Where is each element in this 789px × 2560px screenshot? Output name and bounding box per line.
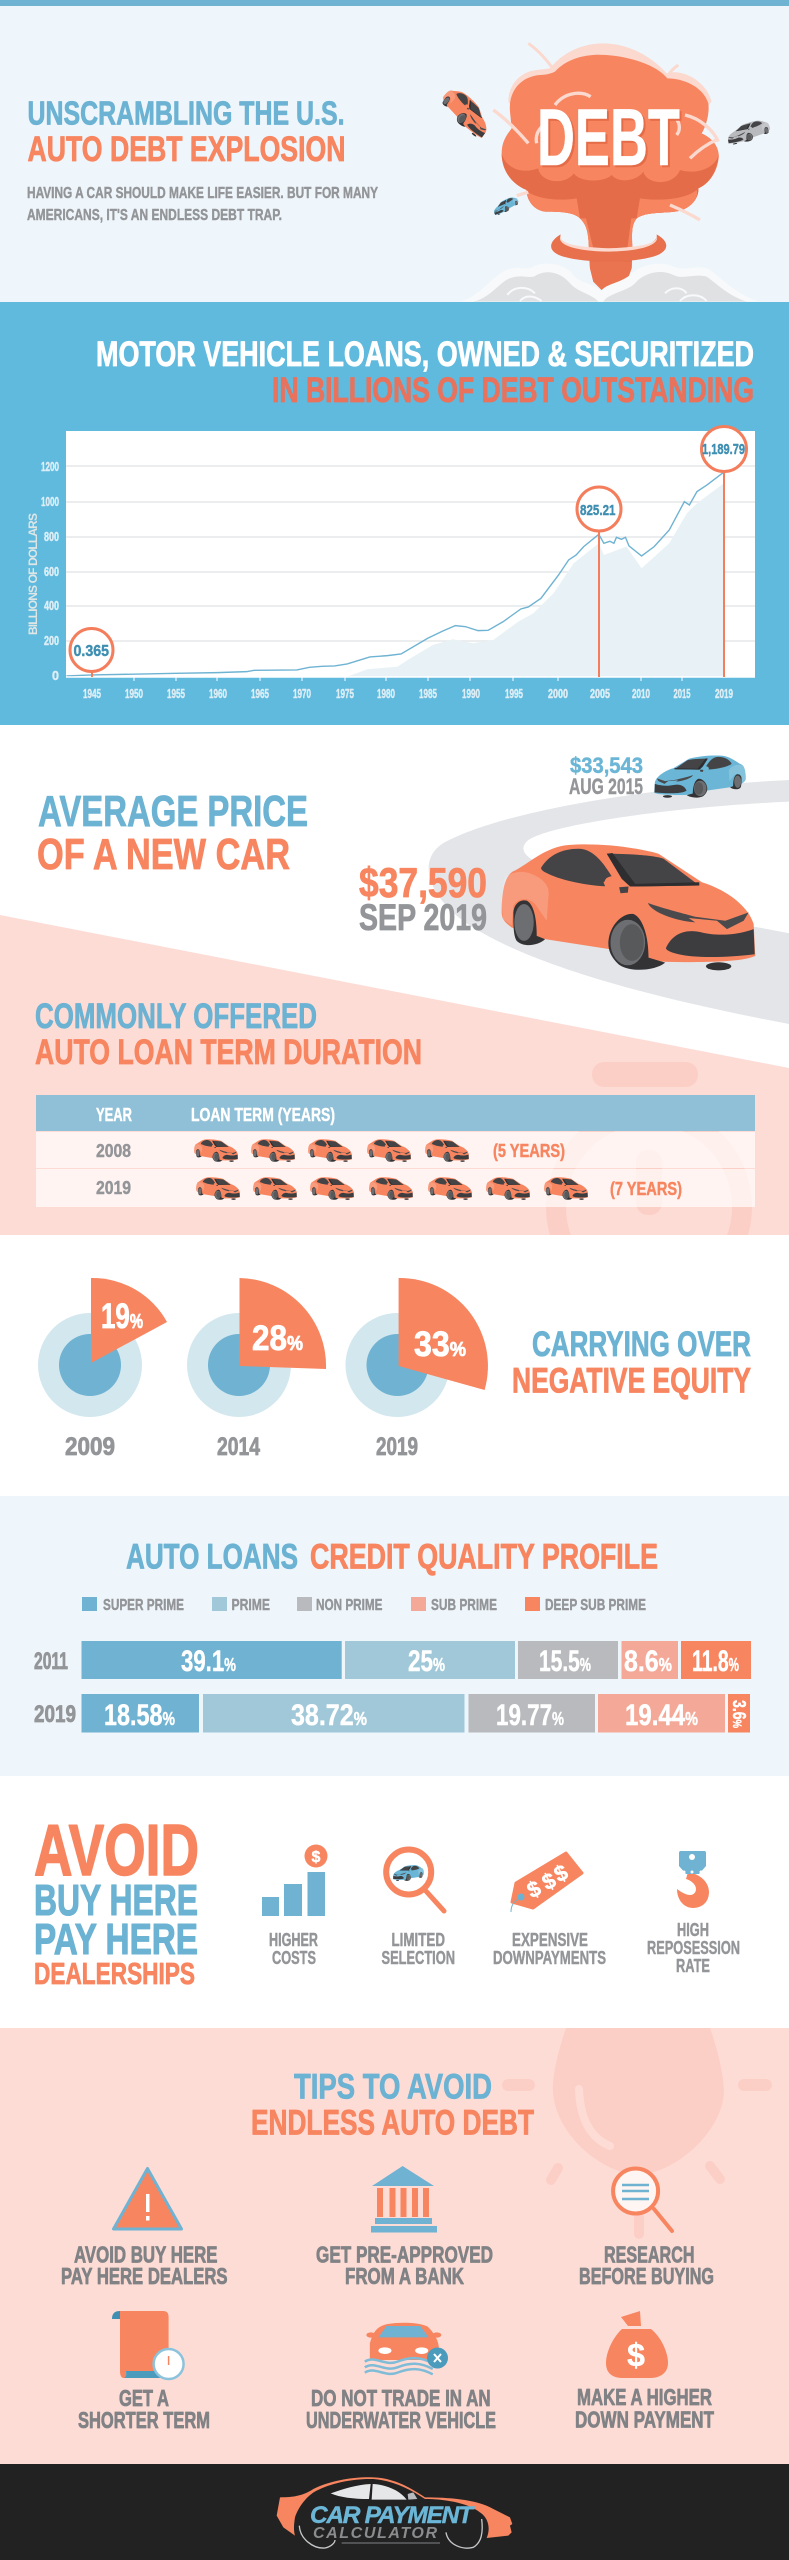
bar: 2011: 11.8% <box>692 1645 739 1678</box>
label: high reposession rate: RATE <box>676 1956 710 1976</box>
tip: higher down payment: $ <box>627 2337 645 2373</box>
tip: shorter term: SHORTER TERM <box>78 2407 210 2433</box>
heading: average price <box>37 787 308 879</box>
legend: DEEP SUB PRIME <box>545 1597 646 1614</box>
line chart: 1995 <box>505 687 523 701</box>
watermark: stopwatch <box>556 1062 742 1300</box>
tip: avoid dealers: PAY HERE DEALERS <box>61 2263 228 2289</box>
heading: credit quality: CREDIT QUALITY PROFILE <box>310 1538 658 1576</box>
callout: 2005 value <box>577 487 621 677</box>
road <box>429 780 789 1024</box>
heading: average price: OF A NEW CAR <box>37 830 290 879</box>
heading: tips: TIPS TO AVOID <box>294 2068 492 2106</box>
bar: 2011: 8.6% <box>624 1645 672 1678</box>
bar: 2019 <box>34 1694 750 1732</box>
icon: higher costs <box>262 1844 328 1916</box>
tip: higher down payment <box>575 2311 714 2432</box>
pie: 2014 <box>187 1278 326 1461</box>
pie: 2019: 33% <box>414 1325 466 1364</box>
heading: average price: AVERAGE PRICE <box>38 787 308 836</box>
heading: loan term: COMMONLY OFFERED <box>35 997 317 1036</box>
heading: avoid: PAY HERE <box>34 1915 198 1964</box>
label: high reposession rate <box>647 1920 740 1976</box>
chart heading <box>96 335 754 410</box>
pie: 2019: 2019 <box>376 1433 418 1461</box>
label: high reposession rate: HIGH <box>677 1920 709 1940</box>
heading: tips: ENDLESS AUTO DEBT <box>251 2104 534 2142</box>
label: higher costs: HIGHER <box>269 1930 318 1950</box>
tip: research: BEFORE BUYING <box>579 2263 714 2289</box>
line chart: 800 <box>44 530 59 544</box>
pie: 2014: 28% <box>252 1319 303 1358</box>
price 2019: $37,590 <box>359 859 487 906</box>
line chart: 1980 <box>377 687 395 701</box>
heading: avoid: DEALERSHIPS <box>34 1956 195 1991</box>
line chart: 1960 <box>209 687 227 701</box>
tip: avoid dealers <box>61 2168 228 2289</box>
table: loan term: LOAN TERM (YEARS) <box>191 1105 335 1125</box>
bar: 2019: 38.72% <box>291 1699 367 1732</box>
line chart: 1950 <box>125 687 143 701</box>
icon: flying orange car <box>436 84 497 140</box>
heading: credit quality: AUTO LOANS <box>126 1538 298 1576</box>
legend: PRIME <box>232 1597 270 1614</box>
callout: 2019 value <box>702 426 746 677</box>
tip: bank: FROM A BANK <box>345 2263 464 2289</box>
icon: price tag: $ <box>550 1859 572 1887</box>
illustration: debt mushroom cloud <box>460 43 758 302</box>
pie: 2009: 19% <box>101 1297 143 1336</box>
icon: tow hook <box>677 1851 709 1908</box>
label: higher costs <box>269 1930 318 1968</box>
tip: bank: GET PRE-APPROVED <box>316 2242 493 2268</box>
legend: SUB PRIME <box>431 1597 497 1614</box>
illustration: debt mushroom cloud: DEBT <box>539 95 682 185</box>
icon: price tag: $ <box>538 1867 560 1895</box>
row: 2008 <box>96 1139 565 1162</box>
line chart: 2019 <box>715 687 733 701</box>
bar: 2019: 18.58% <box>104 1699 175 1732</box>
callout: 2019 value: 1,189.79 <box>702 441 745 458</box>
legend <box>82 1597 646 1614</box>
label: limited selection: LIMITED <box>392 1930 445 1950</box>
icon: flying blue car <box>491 195 520 216</box>
pie: 2014: 2014 <box>217 1433 260 1461</box>
table: loan term <box>36 1095 755 1207</box>
icon: limited selection <box>386 1850 444 1911</box>
illustration: debt mushroom cloud: DEBT <box>537 93 680 183</box>
line chart: 1945 <box>83 687 101 701</box>
legend: SUPER PRIME <box>103 1597 184 1614</box>
tip: shorter term <box>78 2311 210 2433</box>
tip: higher down payment: MAKE A HIGHER <box>577 2384 712 2410</box>
tip: shorter term: GET A <box>119 2385 169 2411</box>
label: expensive downpayments <box>493 1930 606 1968</box>
line chart <box>26 426 755 701</box>
icon: higher costs: $ <box>312 1849 321 1866</box>
tip: underwater vehicle: UNDERWATER VEHICLE <box>306 2407 496 2433</box>
panel: header <box>0 0 789 303</box>
line chart: 1000 <box>41 495 59 509</box>
row: 2008: (5 YEARS) <box>493 1141 565 1161</box>
row: 2019: 2019 <box>96 1178 131 1198</box>
watermark: lightbulb <box>502 2028 772 2239</box>
icon: price tag: $ <box>523 1875 545 1903</box>
line chart: 200 <box>44 634 59 648</box>
panel: negative equity <box>0 1235 789 1496</box>
price 2015: AUG 2015 <box>569 774 643 799</box>
row: 2019: (7 YEARS) <box>610 1179 682 1199</box>
row: 2008: 2008 <box>96 1141 131 1161</box>
intro text: HAVING A CAR SHOULD MAKE LIFE EASIER. BUT FOR MANY <box>27 185 378 202</box>
callout: 1945 value <box>70 628 113 677</box>
line chart: 2000 <box>548 687 568 701</box>
bar: 2011 <box>34 1641 751 1679</box>
panel: avoid dealerships <box>34 1811 740 1991</box>
legend: NON PRIME <box>316 1597 383 1614</box>
label: higher costs: COSTS <box>272 1948 316 1968</box>
line chart: 1985 <box>419 687 437 701</box>
panel: credit quality <box>0 1496 789 1776</box>
logo: car payment calculator <box>277 2477 512 2548</box>
heading: loan term <box>35 997 422 1072</box>
logo: car payment calculator: CALCULATOR <box>313 2525 437 2542</box>
pie: 2009: 2009 <box>65 1433 115 1461</box>
bar: 2011: 39.1% <box>181 1645 236 1678</box>
label: expensive downpayments: EXPENSIVE <box>512 1930 588 1950</box>
heading: avoid: BUY HERE <box>34 1876 198 1925</box>
bar: 2019: 2019 <box>34 1701 76 1728</box>
label: high reposession rate: REPOSESSION <box>647 1938 740 1958</box>
tip: underwater vehicle: DO NOT TRADE IN AN <box>311 2385 491 2411</box>
line chart: 1200 <box>41 460 59 474</box>
line chart: 2010 <box>632 687 650 701</box>
tip: research: RESEARCH <box>604 2242 694 2268</box>
logo: car payment calculator: CAR PAYMENT <box>310 2502 475 2529</box>
bar: 2019: 19.77% <box>496 1699 564 1732</box>
panel: average price and loan term <box>0 725 789 1300</box>
tip: higher down payment: DOWN PAYMENT <box>575 2406 714 2432</box>
line chart: 0 <box>52 669 59 683</box>
tip: avoid dealers: AVOID BUY HERE <box>74 2242 218 2268</box>
callout: 1945 value: 0.365 <box>74 643 109 660</box>
tip: research <box>579 2168 714 2289</box>
callout: 2005 value: 825.21 <box>580 502 616 519</box>
intro text: AMERICANS, IT'S AN ENDLESS DEBT TRAP. <box>27 207 282 224</box>
price 2019: SEP 2019 <box>359 897 487 938</box>
title: AUTO DEBT EXPLOSION <box>28 130 346 169</box>
label: limited selection <box>382 1930 455 1968</box>
label: limited selection: SELECTION <box>382 1948 455 1968</box>
heading: loan term: AUTO LOAN TERM DURATION <box>35 1033 422 1072</box>
line chart: 1990 <box>462 687 480 701</box>
bar: 2011: 2011 <box>34 1648 68 1675</box>
heading: avoid: AVOID <box>34 1811 199 1891</box>
price 2015 <box>569 753 643 799</box>
icon: orange car <box>502 844 755 970</box>
panel: tips <box>0 2028 789 2464</box>
table: loan term: YEAR <box>96 1105 132 1125</box>
label: expensive downpayments: DOWNPAYMENTS <box>493 1948 606 1968</box>
line chart: 1975 <box>336 687 354 701</box>
price 2019 <box>359 859 487 938</box>
tip: bank <box>316 2166 493 2289</box>
icon: blue car <box>654 755 746 798</box>
title <box>28 94 346 169</box>
intro text <box>27 185 378 224</box>
bar: 2011: 15.5% <box>539 1645 591 1678</box>
icon: flying gray car <box>725 118 772 146</box>
row: 2019 <box>96 1177 682 1200</box>
heading: avoid <box>34 1811 199 1991</box>
line chart: 1970 <box>293 687 311 701</box>
panel: footer <box>0 2464 789 2560</box>
line chart: 1955 <box>167 687 185 701</box>
bar: 2019: 19.44% <box>625 1699 698 1732</box>
price 2015: $33,543 <box>570 753 643 778</box>
pie: 2019 <box>346 1278 488 1461</box>
tip: underwater vehicle <box>306 2323 496 2433</box>
line chart: 2015 <box>674 687 691 701</box>
icon: price tag <box>511 1853 582 1912</box>
line chart: 600 <box>44 565 59 579</box>
heading: negative equity <box>512 1325 751 1400</box>
heading: tips <box>251 2068 534 2142</box>
line chart: 2005 <box>590 687 610 701</box>
bar: 2019: 3.6% <box>729 1700 749 1728</box>
line chart: BILLIONS OF DOLLARS <box>26 513 40 635</box>
line chart: 1965 <box>251 687 269 701</box>
title: UNSCRAMBLING THE U.S. <box>28 94 344 132</box>
panel: motor vehicle loans chart <box>0 302 789 725</box>
bar: 2011: 25% <box>408 1645 445 1678</box>
heading: credit quality <box>126 1538 658 1576</box>
line chart: 400 <box>44 599 59 613</box>
pie: 2009 <box>38 1278 167 1461</box>
